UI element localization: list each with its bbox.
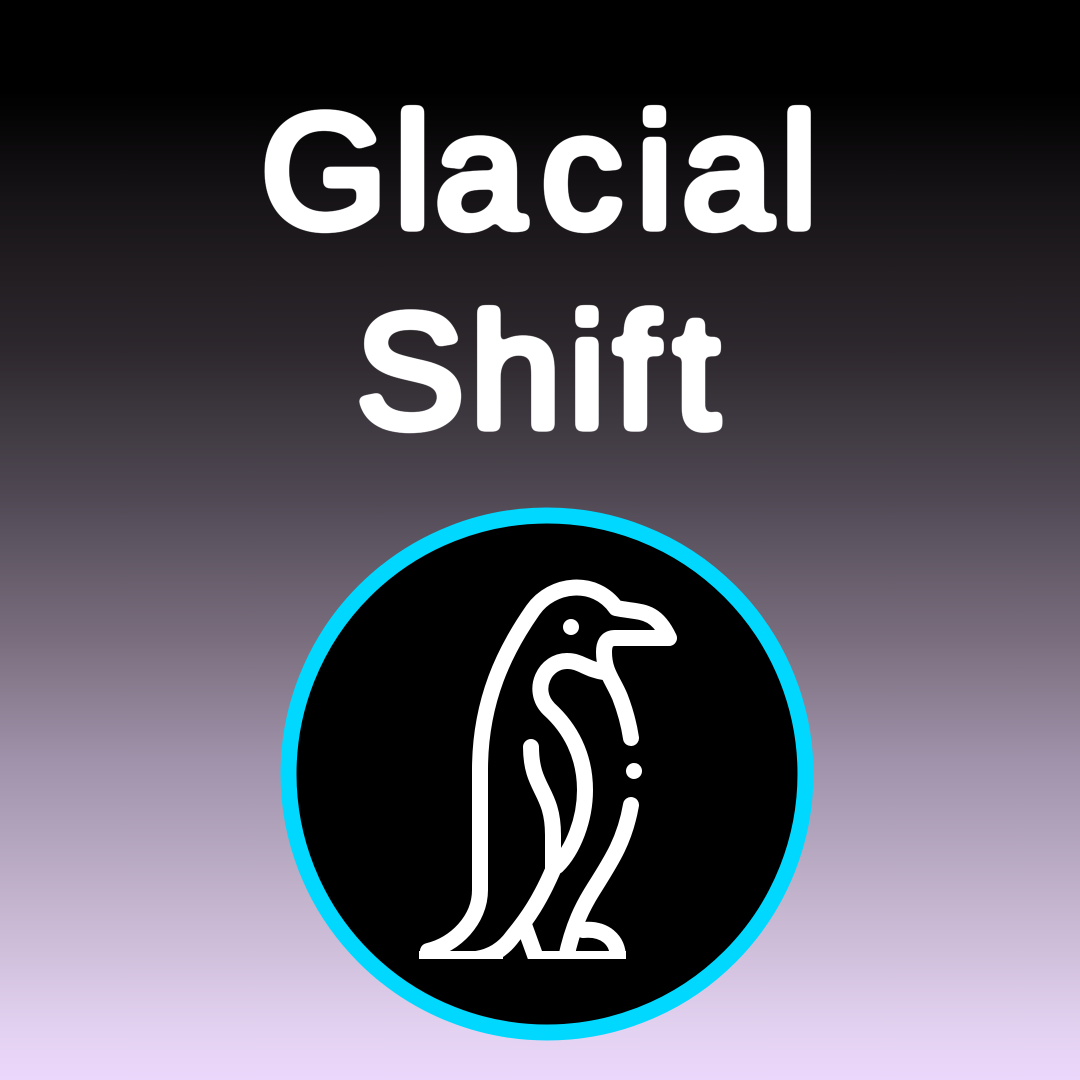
icon: penguin: [419, 588, 669, 959]
penguin eye: [563, 619, 579, 635]
penguin back and head: [428, 588, 669, 951]
penguin belly line and tail: [476, 747, 553, 959]
penguin front leg: [566, 805, 631, 958]
penguin dot: [626, 763, 642, 779]
title: [261, 81, 817, 462]
penguin foot: [583, 930, 618, 958]
title line 2: Shift: [356, 281, 719, 462]
badge circle: [288, 516, 806, 1032]
penguin rear toe: [523, 922, 536, 958]
penguin base line: [419, 951, 626, 959]
penguin wing: [540, 661, 604, 866]
title line 1: Glacial: [261, 81, 817, 262]
